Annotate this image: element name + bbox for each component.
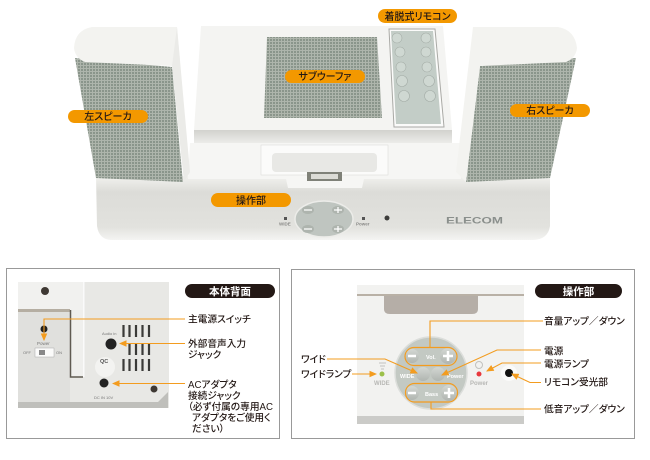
product photo: speaker dock <box>74 26 577 240</box>
rear photo: Audio in <box>102 331 116 336</box>
callout: wide <box>301 354 417 373</box>
panel: controls <box>292 270 634 438</box>
label: subwoofer: サブウーファ <box>298 70 351 83</box>
callout: wide: ワイド <box>301 354 326 366</box>
rear photo <box>18 282 169 408</box>
heading: controls: 操作部 <box>563 285 595 298</box>
label: right speaker: 右スピーカ <box>526 104 574 117</box>
dock tray <box>188 143 461 188</box>
subwoofer grille <box>264 37 382 118</box>
callout: volume up/down <box>430 314 626 347</box>
callout: bass up/down <box>431 402 626 416</box>
callout: audio in <box>120 337 246 361</box>
label: subwoofer <box>285 70 365 83</box>
Power lamp and label <box>356 217 370 226</box>
label: detachable remote <box>378 9 457 23</box>
controls photo <box>357 285 524 424</box>
rear photo: DC IN 10V <box>94 395 113 400</box>
right speaker <box>456 27 577 182</box>
callout: power lamp: 電源ランプ <box>544 358 589 370</box>
callout: AC adapter: ださい） <box>192 423 224 435</box>
label: detachable remote: 着脱式リモコン <box>384 10 451 23</box>
heading: controls <box>535 284 622 298</box>
controls photo: Power <box>447 374 464 380</box>
dock connector <box>307 172 342 181</box>
callout: AC adapter: アダプタをご使用く <box>192 411 271 424</box>
callout: AC adapter: ACアダプタ <box>188 378 237 391</box>
callout: power: 電源 <box>544 344 564 358</box>
WIDE lamp and label <box>279 217 291 226</box>
rear photo: ON <box>56 350 62 355</box>
controls photo: Bass <box>425 392 438 398</box>
controls photo: WIDE <box>374 381 390 387</box>
label: controls: 操作部 <box>236 194 266 207</box>
dock base <box>96 176 550 240</box>
centre back panel <box>194 26 452 130</box>
control dial <box>295 201 353 237</box>
rear photo: OFF <box>23 350 32 355</box>
ELECOM logo: ELECOM <box>446 216 503 226</box>
callout: power <box>442 344 564 375</box>
callout: remote receiver: リモコン受光部 <box>544 376 608 388</box>
callout: power lamp <box>487 358 589 371</box>
callout: audio in: ジャック <box>188 349 221 361</box>
label: right speaker <box>510 104 590 117</box>
callout: main power switch <box>44 312 251 340</box>
callout: AC adapter: （必ず付属の専用AC <box>188 400 273 413</box>
panel: rear view <box>6 268 280 438</box>
label: left speaker <box>68 110 148 123</box>
rear photo: QC <box>100 359 108 365</box>
controls photo: Power <box>470 381 489 387</box>
rear photo: Power <box>37 341 50 346</box>
callout: AC adapter: 接続ジャック <box>188 389 241 402</box>
button highlights <box>405 348 458 402</box>
controls photo: Vol. <box>426 355 436 361</box>
WIDE lamp and label: WIDE <box>279 222 291 226</box>
label: left speaker: 左スピーカ <box>84 110 132 123</box>
vents <box>124 325 149 371</box>
Power lamp and label: Power <box>356 222 370 226</box>
callout: remote receiver <box>512 374 608 388</box>
left speaker <box>74 27 190 182</box>
remote receiver <box>384 216 390 220</box>
callout: volume up/down: 音量アップ／ダウン <box>544 314 626 328</box>
callout: wide lamp: ワイドランプ <box>301 368 352 380</box>
heading: rear view: 本体背面 <box>209 285 251 298</box>
heading: rear view <box>185 284 275 298</box>
callout: audio in: 外部音声入力 <box>188 337 246 350</box>
callout: main power switch: 主電源スイッチ <box>188 312 251 326</box>
label: controls <box>211 193 291 207</box>
controls photo: WIDE <box>400 374 415 380</box>
detachable remote <box>389 29 444 127</box>
callout: wide lamp <box>301 368 376 380</box>
callout: bass up/down: 低音アップ／ダウン <box>544 402 626 416</box>
callout: AC adapter <box>113 378 273 435</box>
